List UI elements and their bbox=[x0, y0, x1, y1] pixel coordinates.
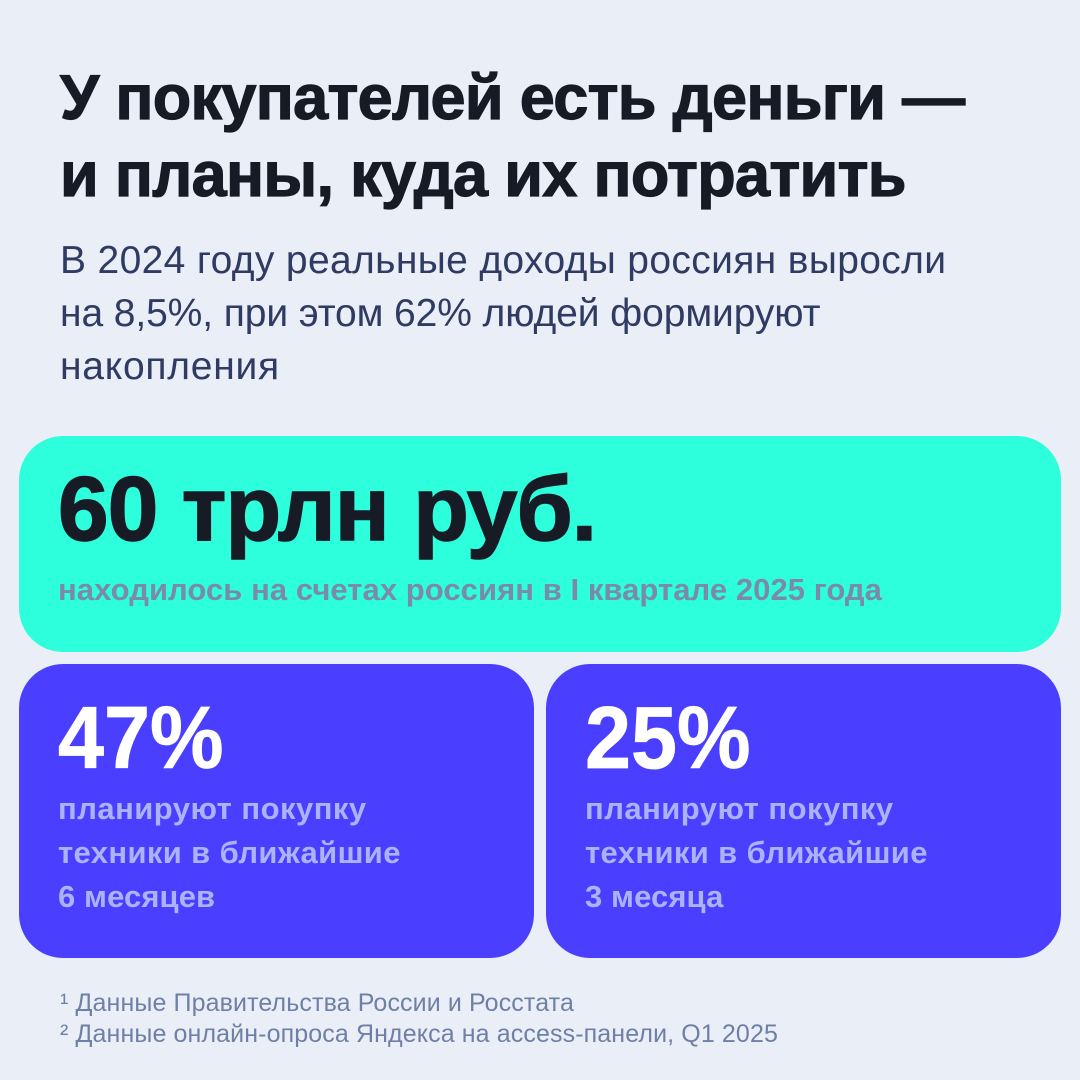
subtitle bbox=[60, 239, 946, 388]
subtitle: накопления bbox=[60, 345, 280, 388]
big number: 60 трлн руб. bbox=[58, 459, 596, 560]
subtitle: В 2024 году реальные доходы россиян выросли bbox=[60, 239, 946, 282]
subtitle: на 8,5%, при этом 62% людей формируют bbox=[60, 292, 820, 335]
percent caption: планируют покупку bbox=[585, 791, 894, 826]
footnotes: ² Данные онлайн-опроса Яндекса на access-панели, Q1 2025 bbox=[60, 1020, 778, 1048]
title: и планы, куда их потратить bbox=[60, 140, 906, 210]
percent caption: 6 месяцев bbox=[58, 879, 215, 914]
percent caption bbox=[585, 791, 928, 914]
percent value: 25% bbox=[585, 688, 751, 787]
percent caption: техники в ближайшие bbox=[58, 835, 401, 870]
percent caption: техники в ближайшие bbox=[585, 835, 928, 870]
percent caption: 3 месяца bbox=[585, 879, 723, 914]
panel caption: находилось на счетах россиян в I квартале 2025 года bbox=[58, 572, 882, 607]
panel: 25 percent bbox=[546, 664, 1061, 958]
footnotes: ¹ Данные Правительства России и Росстата bbox=[60, 989, 574, 1017]
panel: 60 trillion bbox=[19, 436, 1061, 652]
percent caption: планируют покупку bbox=[58, 791, 367, 826]
percent caption bbox=[58, 791, 401, 914]
title bbox=[59, 63, 966, 210]
panel: 47 percent bbox=[19, 664, 534, 958]
title: У покупателей есть деньги — bbox=[60, 63, 964, 133]
footnotes bbox=[60, 989, 778, 1048]
percent value: 47% bbox=[58, 688, 224, 787]
